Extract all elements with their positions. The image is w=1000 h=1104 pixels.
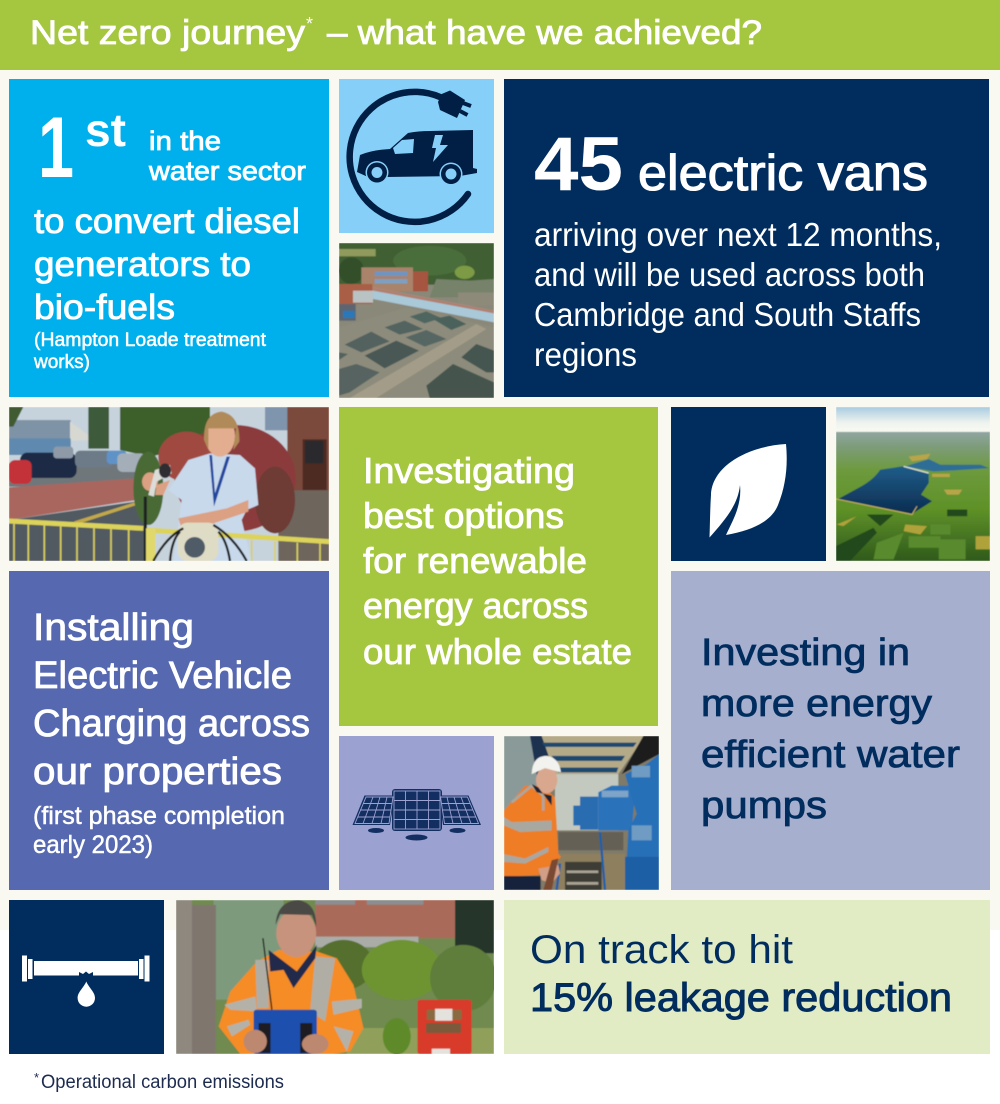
photo: woman with EV charger	[9, 407, 329, 561]
photo: aerial reservoir	[836, 407, 990, 561]
icon: solar panels	[339, 736, 494, 890]
title banner: *	[306, 14, 313, 34]
panel: 45 electric vans: and will be used across both	[534, 256, 925, 293]
footnote: *	[34, 1070, 39, 1085]
panel: investing in efficient pumps: more energy	[701, 683, 932, 725]
panel: installing EV charging: our properties	[33, 751, 282, 793]
panel: first in water sector biofuels: in the	[149, 126, 221, 156]
panel: investigating renewable energy: our whole estate	[363, 631, 632, 672]
panel: investing in efficient pumps: pumps	[701, 785, 827, 827]
panel: installing EV charging: (first phase completion	[33, 802, 285, 830]
panel: investigating renewable energy: for renewable	[363, 540, 587, 581]
panel: first in water sector biofuels: works)	[33, 352, 90, 373]
panel: first in water sector biofuels: to convert diesel	[34, 202, 300, 241]
panel: investigating renewable energy: Investigating	[363, 450, 575, 491]
panel: 45 electric vans: electric vans	[638, 145, 928, 201]
panel: investigating renewable energy	[339, 407, 658, 726]
panel: 45 electric vans: 45	[534, 122, 623, 207]
panel: 15% leakage reduction: On track to hit	[530, 928, 793, 972]
title banner: Net zero journey	[30, 14, 305, 52]
icon: leaking pipe	[9, 900, 164, 1054]
panel: investigating renewable energy: energy across	[363, 585, 588, 626]
panel: first in water sector biofuels	[9, 79, 329, 397]
panel: 15% leakage reduction	[504, 900, 990, 1054]
photo: water treatment works aerial view	[339, 243, 494, 398]
panel: first in water sector biofuels: bio-fuels	[34, 288, 175, 327]
panel: investigating renewable energy: best options	[363, 495, 564, 536]
panel: 45 electric vans: Cambridge and South Staffs	[534, 296, 921, 333]
photo: engineer with leak detection device	[176, 900, 497, 1055]
icon: leaf	[671, 407, 826, 561]
panel: first in water sector biofuels: (Hampton Loade treatment	[34, 330, 267, 351]
icon: electric van with plug	[339, 79, 494, 233]
panel: first in water sector biofuels: st	[85, 104, 126, 156]
panel: 15% leakage reduction: 15% leakage reduction	[530, 976, 952, 1020]
panel: installing EV charging: Installing	[33, 607, 194, 649]
panel: 45 electric vans: arriving over next 12 months,	[534, 216, 942, 253]
panel: 45 electric vans: regions	[534, 336, 637, 373]
title banner: – what have we achieved?	[327, 14, 762, 52]
panel: investing in efficient pumps	[671, 571, 990, 890]
footnote: Operational carbon emissions	[41, 1072, 284, 1093]
panel: first in water sector biofuels: 1	[38, 100, 74, 196]
panel: investing in efficient pumps: Investing in	[701, 632, 910, 674]
panel: installing EV charging: early 2023)	[33, 831, 153, 859]
title banner	[0, 0, 1000, 70]
panel: 45 electric vans	[504, 79, 989, 397]
panel: installing EV charging	[9, 571, 329, 890]
panel: first in water sector biofuels: water sector	[148, 156, 306, 186]
panel: investing in efficient pumps: efficient water	[701, 734, 960, 776]
panel: first in water sector biofuels: generators to	[34, 245, 251, 284]
photo: engineer with blue water pumps	[504, 736, 659, 890]
panel: installing EV charging: Charging across	[33, 703, 310, 745]
panel: installing EV charging: Electric Vehicle	[33, 655, 292, 697]
